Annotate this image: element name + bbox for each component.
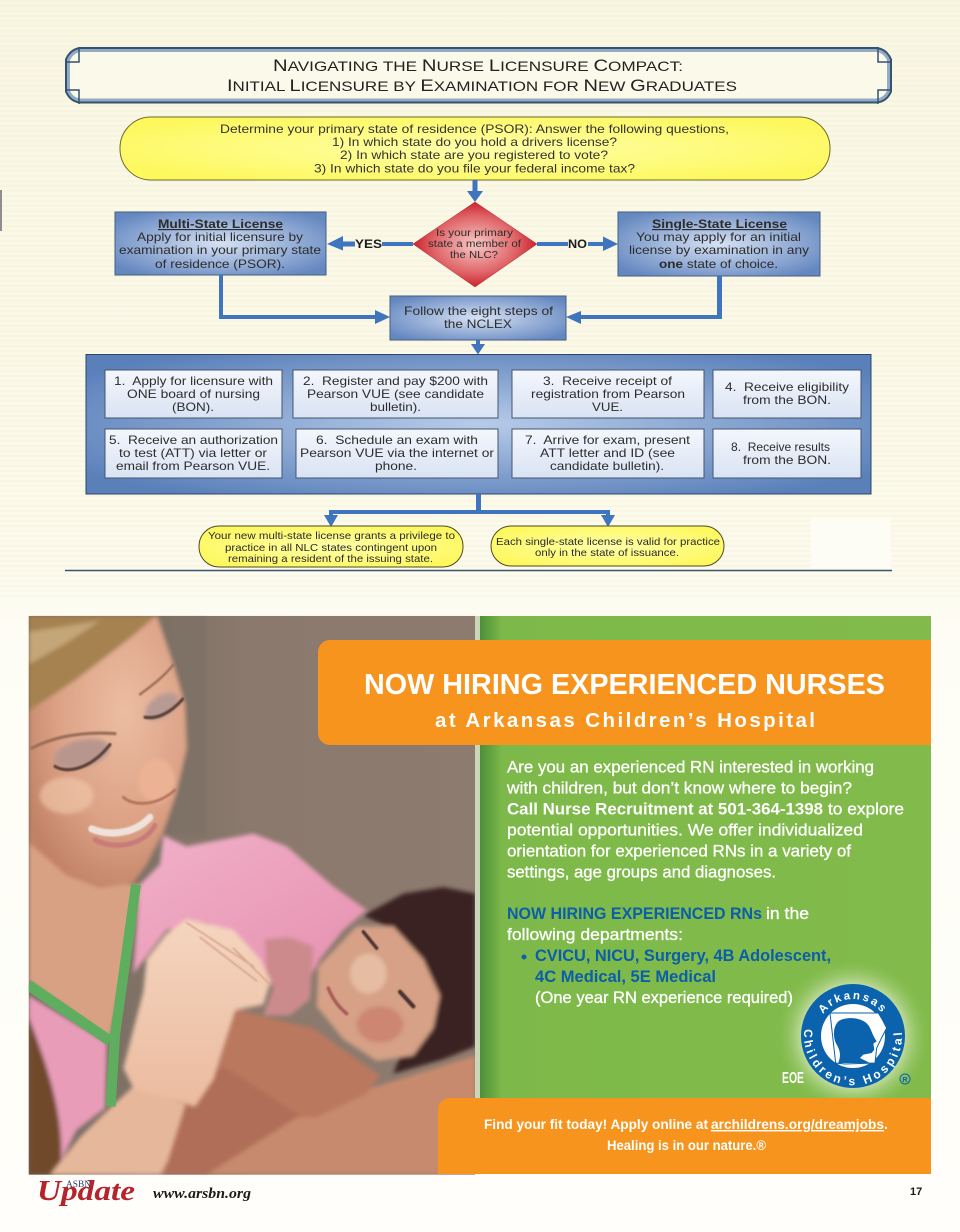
baby body <box>216 1008 380 1118</box>
orange header: at Arkansas Children’s Hospital <box>435 709 815 732</box>
arrow: follow box to steps panel <box>471 340 485 354</box>
title banner <box>66 47 891 104</box>
departments list: (One year RN experience required) <box>535 989 793 1007</box>
panel: single-state license: one state of choice. <box>659 257 778 271</box>
pale strip beside photo <box>475 616 480 1174</box>
step 6: phone. <box>375 459 417 473</box>
decision diamond: state a member of <box>428 239 521 250</box>
title banner: INITIAL LICENSURE BY EXAMINATION FOR NEW GRADUATES <box>227 77 737 95</box>
baby face <box>317 926 440 1061</box>
departments list: 4C Medical, 5E Medical <box>535 968 716 986</box>
nurse face <box>29 615 187 888</box>
step 4: 4. Receive eligibility <box>725 380 849 394</box>
arrow: YES <box>327 236 413 251</box>
departments list: NOW HIRING EXPERIENCED RNs <box>507 905 762 923</box>
yellow start pill: determine PSOR <box>120 117 830 180</box>
logo: ASBN Update: Update <box>37 1175 135 1207</box>
yellow start pill: determine PSOR: Determine your primary state of residence (PSOR): Answer the following questions, <box>220 122 729 136</box>
orange footer banner <box>438 1098 931 1174</box>
lower arm under baby <box>160 1055 475 1175</box>
cheek and nose highlights <box>40 777 93 814</box>
eye shadows <box>53 737 111 768</box>
decision diamond: the NLC? <box>450 250 498 261</box>
step 7: 7. Arrive for exam, present <box>525 433 691 447</box>
step 8 <box>713 429 861 478</box>
orange header: NOW HIRING EXPERIENCED NURSES <box>364 669 885 701</box>
registered mark <box>900 1074 910 1084</box>
step 1: 1. Apply for licensure with <box>114 374 273 388</box>
follow the eight steps box: Follow the eight steps of <box>404 304 554 318</box>
panel: multi-state license: examination in your primary state <box>119 243 321 257</box>
registered mark: R <box>902 1075 908 1084</box>
panel: single-state license <box>618 212 820 276</box>
step 7: candidate bulletin). <box>550 459 664 473</box>
step 6: Pearson VUE via the internet or <box>300 446 494 460</box>
body copy: settings, age groups and diagnoses. <box>507 864 776 882</box>
step 4 <box>713 370 861 418</box>
departments list <box>507 905 831 1007</box>
yellow start pill: determine PSOR: 1) In which state do you hold a drivers license? <box>332 135 618 149</box>
outcome pill: multi-state: Your new multi-state license grants a privilege to <box>208 530 455 542</box>
website: www.arsbn.org <box>153 1186 251 1202</box>
panel: multi-state license: Multi-State License <box>158 217 283 231</box>
arrow: YES: YES <box>355 237 382 251</box>
panel: single-state license: Single-State License <box>652 217 788 231</box>
arrow: NO: NO <box>568 237 587 251</box>
scrubs green trim <box>29 885 136 1106</box>
yellow start pill: determine PSOR: 3) In which state do you file your federal income tax? <box>314 162 635 176</box>
body copy: potential opportunities. We offer individualized <box>507 822 863 840</box>
split arrows to outcome pills <box>324 494 615 527</box>
arrow: pill to diamond <box>467 180 483 202</box>
logo glow <box>775 958 931 1114</box>
outcome pill: single-state: only in the state of issuance. <box>535 547 679 559</box>
outcome pill: multi-state: remaining a resident of the issuing state. <box>228 553 433 565</box>
step 1: (BON). <box>172 400 214 414</box>
connector arrow: single-state to follow box <box>566 276 722 324</box>
step 3: VUE. <box>592 400 623 414</box>
orange footer banner: Find your fit today! Apply online at <box>484 1116 708 1132</box>
decision diamond: Is your primary <box>436 228 513 239</box>
orange header <box>318 640 931 745</box>
departments list: in the <box>766 905 809 923</box>
step 8: from the BON. <box>743 453 831 467</box>
lower hair <box>29 1017 61 1175</box>
nurse forearm <box>50 1086 197 1175</box>
step 2 <box>293 370 498 418</box>
step 7 <box>512 429 704 478</box>
step 5: 5. Receive an authorization <box>109 433 278 447</box>
follow the eight steps box: the NCLEX <box>444 317 512 331</box>
step 2: bulletin). <box>370 400 421 414</box>
orange footer banner: Healing is in our nature.® <box>607 1137 767 1153</box>
step 4: from the BON. <box>743 393 831 407</box>
step 5 <box>105 429 282 478</box>
nurse pink scrubs <box>133 834 367 977</box>
step 7: ATT letter and ID (see <box>540 446 676 460</box>
arrow: NO <box>537 236 618 251</box>
decision diamond <box>413 202 537 287</box>
orange footer banner: archildrens.org/dreamjobs <box>711 1116 884 1132</box>
pale patch <box>811 518 891 568</box>
step 3: registration from Pearson <box>531 387 685 401</box>
nurse hair <box>29 615 157 711</box>
body copy: with children, but don’t know where to begin? <box>506 780 852 798</box>
body copy: orientation for experienced RNs in a variety of <box>507 842 851 860</box>
baby hand <box>263 937 313 1015</box>
follow the eight steps box <box>390 296 566 340</box>
orange footer banner: . <box>884 1116 888 1132</box>
page number: 17 <box>910 1186 922 1198</box>
panel: single-state license: You may apply for an initial <box>636 230 801 244</box>
step 8: 8. Receive results <box>731 440 830 454</box>
panel: green ad background <box>480 616 931 1174</box>
panel: multi-state license <box>115 212 326 275</box>
body copy <box>506 758 904 882</box>
step 5: email from Pearson VUE. <box>116 459 270 473</box>
outcome pill: single-state: Each single-state license is valid for practice <box>496 536 720 548</box>
photo: nurse holding newborn <box>29 603 475 1175</box>
step 6: 6. Schedule an exam with <box>316 433 478 447</box>
step 1 <box>105 370 282 418</box>
baby hair <box>363 887 475 1074</box>
panel: single-state license: license by examination in any <box>629 243 809 257</box>
EOE label: EOE <box>782 1070 804 1087</box>
logo: Arkansas Children's Hospital: Arkansas <box>819 992 885 1014</box>
body copy: Call Nurse Recruitment at 501-364-1398 <box>507 800 823 818</box>
step 2: Pearson VUE (see candidate <box>307 387 485 401</box>
title banner: NAVIGATING THE NURSE LICENSURE COMPACT: <box>273 57 683 75</box>
panel: eight steps <box>86 354 871 494</box>
logo: Arkansas Children's Hospital: Children’s Hospital <box>804 1030 902 1086</box>
nurse neck and chest <box>29 835 142 1039</box>
step 2: 2. Register and pay $200 with <box>303 374 488 388</box>
body copy: to explore <box>828 800 904 818</box>
departments list: CVICU, NICU, Surgery, 4B Adolescent, <box>535 947 831 965</box>
yellow start pill: determine PSOR: 2) In which state are you registered to vote? <box>340 148 609 162</box>
step 3: 3. Receive receipt of <box>543 374 673 388</box>
lower left pink scrubs <box>29 995 107 1163</box>
outcome pill: multi-state: practice in all NLC states contingent upon <box>225 542 437 554</box>
outcome pill: multi-state <box>199 526 463 567</box>
panel: multi-state license: of residence (PSOR). <box>155 257 285 271</box>
logo: Arkansas Children's Hospital <box>801 984 905 1088</box>
connector arrow: multi-state to follow box <box>219 275 390 324</box>
step 5: to test (ATT) via letter or <box>119 446 267 460</box>
facial features <box>32 665 413 1014</box>
logo: ASBN Update: ASBN <box>66 1179 92 1189</box>
panel: multi-state license: Apply for initial licensure by <box>137 230 303 244</box>
step 6 <box>296 429 498 478</box>
step 3 <box>512 370 704 418</box>
outcome pill: single-state <box>491 526 724 566</box>
body copy: Are you an experienced RN interested in working <box>507 758 874 776</box>
step 1: ONE board of nursing <box>127 387 260 401</box>
departments list: following departments: <box>507 926 683 944</box>
nurse hand <box>123 919 271 1106</box>
